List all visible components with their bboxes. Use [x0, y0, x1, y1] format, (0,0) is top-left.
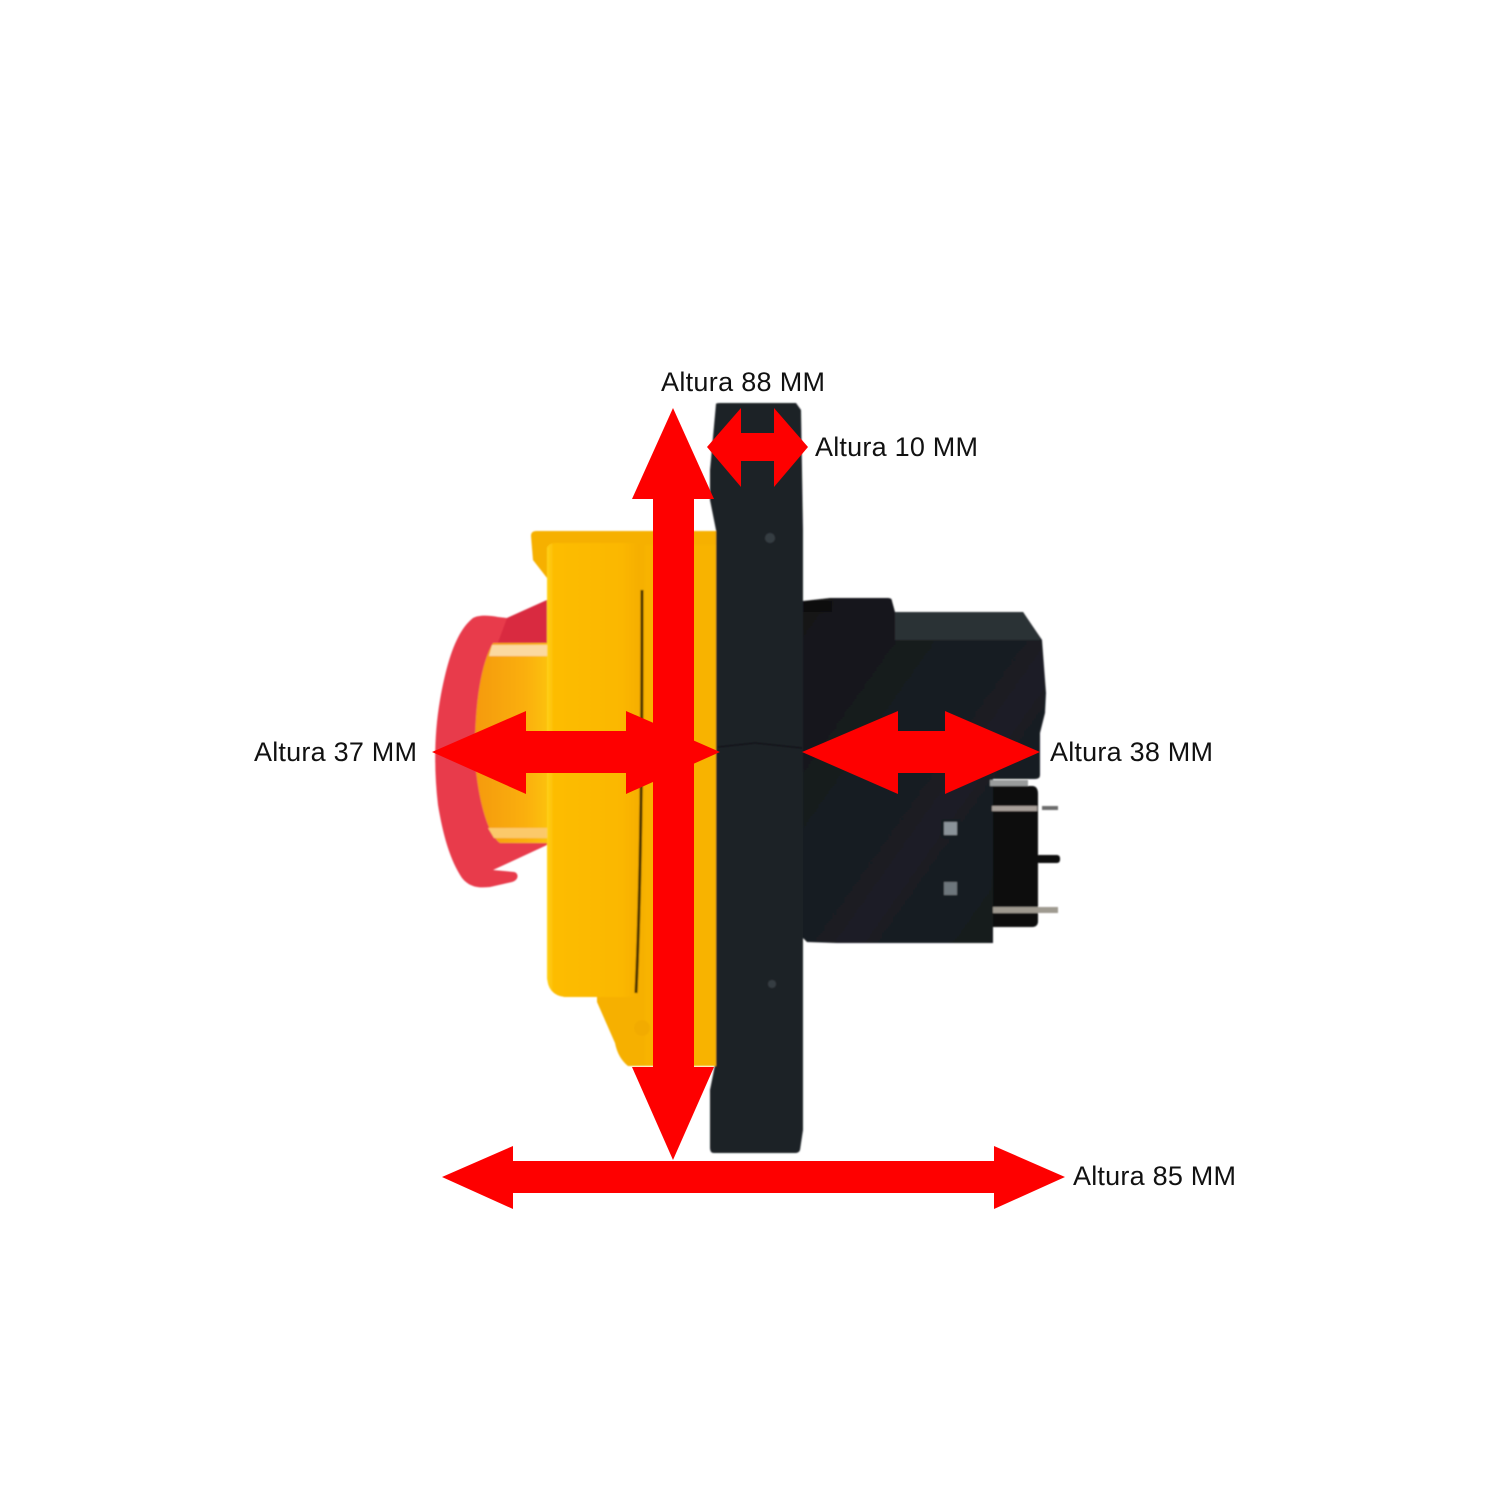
black mounting plate [710, 403, 803, 1153]
arrow: horizontal 37 mm [432, 711, 720, 794]
arrow: horizontal 85 mm [442, 1146, 1065, 1209]
label: altura 85 mm: Altura 85 MM [1073, 1161, 1236, 1191]
label: altura 10 mm: Altura 10 MM [815, 432, 978, 462]
black rear body [803, 598, 1046, 943]
red emergency button [435, 600, 547, 887]
status indicator squares [941, 819, 960, 898]
label: altura 88 mm: Altura 88 MM [661, 367, 825, 397]
arrow: vertical 88 mm [632, 408, 714, 1160]
arrow: horizontal 10 mm [707, 408, 808, 487]
terminals [990, 780, 1060, 927]
label: altura 38 mm: Altura 38 MM [1050, 737, 1213, 767]
product: switch [435, 403, 1060, 1153]
yellow housing [531, 531, 716, 1066]
label: altura 37 mm: Altura 37 MM [254, 737, 417, 767]
arrow: horizontal 38 mm [802, 711, 1040, 794]
